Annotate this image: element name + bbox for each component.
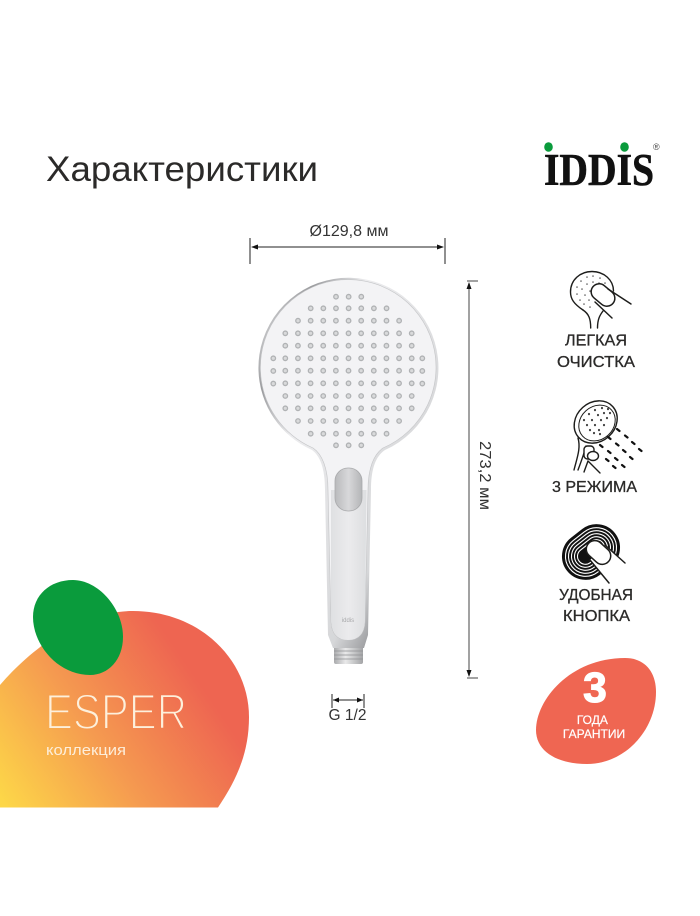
shower thread [334,644,363,664]
badge: three year warranty: ГАРАНТИИ [563,727,625,741]
handle logo: iddis [342,618,354,624]
title: Характеристики [46,150,318,189]
icon: easy cleaning [570,272,631,328]
shower body outline [258,278,438,648]
shower face [260,280,436,640]
dimension: total length [466,281,493,678]
label: easy cleaning: ОЧИСТКА [557,354,635,371]
mode button [335,468,362,511]
spray nozzles [273,297,422,445]
icon: comfortable button [553,515,629,589]
dimension: head diameter: Ø129,8 мм [310,223,388,240]
collection name: ESPER [45,684,187,740]
label: three modes: 3 РЕЖИМА [552,479,637,496]
label: comfortable button: УДОБНАЯ [559,587,633,604]
logo: IDDIS: ® [653,142,660,152]
dimension: total length: 273,2 мм [476,441,493,510]
badge: three year warranty [536,658,656,764]
dimension: thread G 1/2: G 1/2 [329,707,366,724]
badge: three year warranty: ГОДА [577,713,608,727]
label: easy cleaning [557,332,635,371]
badge: three year warranty: 3 [583,664,607,712]
label: easy cleaning: ЛЕГКАЯ [565,332,627,350]
label: comfortable button [559,587,633,625]
logo: IDDIS: IDDIS [544,145,654,195]
dimension: thread G 1/2 [329,694,366,724]
product: hand shower [258,278,438,664]
dimension: head diameter [250,223,445,264]
green blob [33,580,123,675]
panel: collection blob [0,580,249,808]
label: comfortable button: КНОПКА [563,608,630,625]
icon: three modes [566,392,642,473]
collection caption: коллекция [46,742,126,759]
orange gradient blob [0,611,249,808]
handle panel [331,490,366,640]
